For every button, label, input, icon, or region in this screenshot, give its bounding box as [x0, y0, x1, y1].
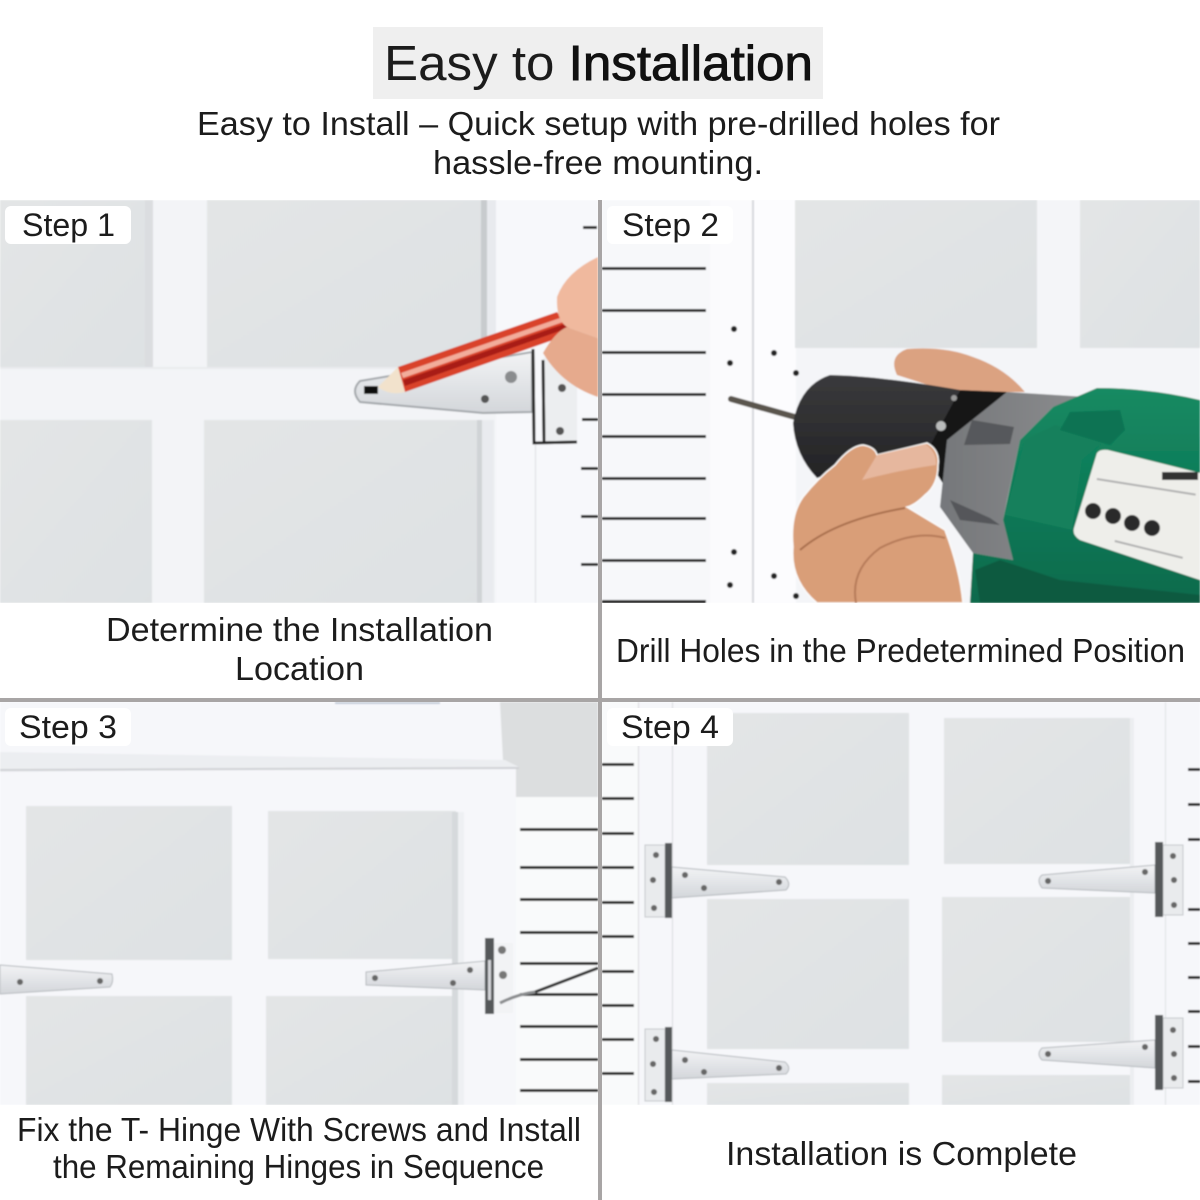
step 1 label: [5, 206, 131, 244]
louvers: [602, 200, 710, 603]
hinge top left: [645, 843, 789, 918]
panes: [707, 713, 1130, 1105]
caption: step 3: Fix the T- Hinge With Screws and Install: [17, 1111, 581, 1148]
frame edges: [602, 702, 1166, 1105]
panes: [26, 806, 464, 1105]
caption: step 1: Determine the Installation: [106, 611, 493, 648]
step 3 label: Step 3: [19, 709, 117, 745]
title: Easy to Installation: [384, 37, 813, 91]
subtitle: Easy to Install – Quick setup with pre-drilled holes for: [197, 105, 1000, 142]
hinge bottom right: [1039, 1015, 1183, 1090]
drill: [793, 375, 1200, 603]
caption: step 2: Drill Holes in the Predetermined Position: [616, 632, 1185, 669]
louver lines: [602, 763, 1200, 1083]
frame and panes: [710, 200, 1200, 603]
glass panes: [0, 200, 495, 603]
caption: step 3: [17, 1111, 581, 1185]
hinge top right: [1039, 842, 1183, 917]
caption: step 1: [106, 611, 493, 687]
pencil: [378, 312, 573, 393]
hinge bottom left: [645, 1027, 789, 1102]
hand: [792, 443, 963, 603]
left hinge: [0, 965, 113, 994]
panel: step 4 photo: [602, 702, 1200, 1105]
step 3 label: [5, 708, 131, 746]
hinge: [355, 349, 577, 443]
step 2 label: [607, 206, 733, 244]
tick from neighbouring panel: [602, 226, 608, 229]
pilot holes: [727, 326, 799, 599]
screw marks: [581, 226, 598, 566]
step 4 label: [607, 708, 733, 746]
panel: step 1 photo: [0, 200, 598, 603]
right hinge: [366, 938, 513, 1014]
title: [373, 27, 823, 99]
drill bit: [731, 399, 795, 417]
top cap moulding: [0, 702, 598, 798]
step 4 label: Step 4: [621, 709, 719, 745]
panel: step 3 photo: [0, 702, 598, 1105]
thumb behind drill: [894, 348, 1025, 392]
panel: step 2 photo: [602, 200, 1200, 603]
subtitle: hassle-free mounting.: [433, 144, 763, 181]
step 1 label: Step 1: [22, 207, 115, 243]
subtitle: [197, 105, 1000, 181]
caption: step 4: Installation is Complete: [726, 1135, 1077, 1172]
caption: step 3: the Remaining Hinges in Sequence: [53, 1148, 544, 1185]
screwdriver: [500, 968, 598, 1003]
caption: step 1: Location: [235, 650, 364, 687]
louver lines: [520, 828, 598, 1092]
hand: [543, 257, 598, 397]
step 2 label: Step 2: [622, 207, 719, 243]
